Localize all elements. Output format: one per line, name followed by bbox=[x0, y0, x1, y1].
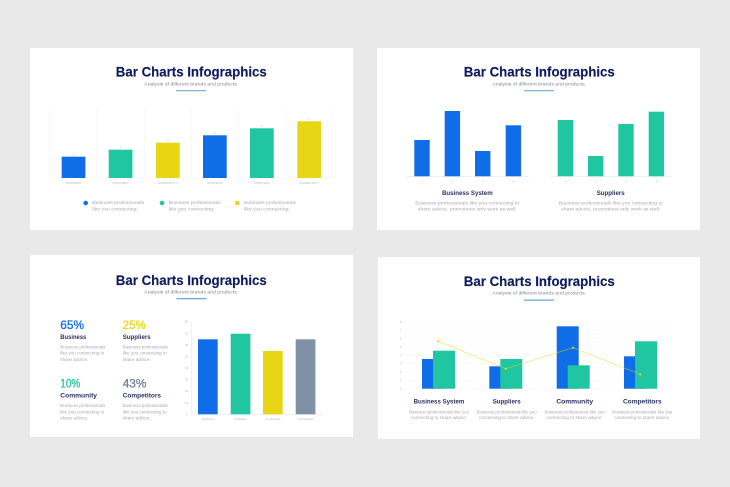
bar chart: six rising bars: 7 bbox=[308, 117, 310, 121]
stat: competitors 43%: like you connecting to bbox=[123, 409, 167, 415]
legend: like you connecting. bbox=[92, 207, 138, 213]
bar chart: suppliers: 3 bbox=[625, 180, 627, 184]
stat: business 65%: share advice. bbox=[60, 357, 88, 363]
title underline bbox=[524, 300, 554, 301]
text block: competitors: connecting to share advice. bbox=[614, 415, 670, 421]
text block: community: Business professionals like you bbox=[545, 409, 605, 415]
subtitle: Analysis of different brands and products. bbox=[492, 291, 586, 297]
bar chart: business system: 2 bbox=[452, 180, 454, 184]
bar chart: four columns: Business bbox=[202, 417, 214, 421]
panel: two column charts slide bbox=[377, 48, 700, 230]
text block: business system bbox=[409, 399, 469, 421]
bar chart: four columns: 60 bbox=[185, 343, 189, 347]
text block: competitors: Business professionals like you bbox=[612, 409, 673, 415]
bar chart: four columns: 10 bbox=[185, 401, 189, 405]
bar chart: four columns bbox=[185, 320, 323, 421]
bar chart: six rising bars: COMMUNITY bbox=[299, 181, 319, 185]
bar chart: six rising bars: COMMUNITY bbox=[158, 181, 178, 185]
title: Bar Charts Infographics bbox=[464, 64, 615, 80]
text block: business system: Business System bbox=[414, 399, 464, 406]
text block: business system: Business System bbox=[442, 190, 493, 197]
bar chart: business system: 3 bbox=[482, 180, 484, 184]
stat: business 65%: Business professionals bbox=[60, 344, 106, 350]
stat: suppliers 25%: Business professionals bbox=[123, 344, 168, 350]
combo chart: bars and line: 2 bbox=[400, 370, 402, 374]
text block: business system bbox=[415, 190, 520, 213]
text block: competitors bbox=[612, 399, 673, 421]
bar chart: six rising bars: BUSINESS bbox=[207, 181, 222, 185]
panel: percentages and column chart slide bbox=[30, 255, 353, 437]
legend: Business professionals bbox=[244, 200, 297, 206]
bar chart: four columns: 0 bbox=[186, 412, 188, 416]
combo chart: bars and line: 5 bbox=[400, 345, 402, 349]
bar chart: six rising bars: 6 bbox=[261, 124, 263, 128]
stat: competitors 43%: Business professionals bbox=[123, 403, 168, 409]
text block: business system: connecting to share advice. bbox=[411, 415, 467, 421]
legend: like you connecting. bbox=[169, 207, 215, 213]
title: Bar Charts Infographics bbox=[116, 64, 267, 80]
combo chart: bars and line: 1 bbox=[400, 378, 402, 382]
text block: suppliers: Suppliers bbox=[493, 399, 521, 406]
stat: competitors 43%: Competitors bbox=[123, 393, 161, 400]
combo chart: bars and line: 3 bbox=[400, 362, 402, 366]
text block: business system: Business professionals like you bbox=[409, 409, 469, 415]
text block: suppliers: Business professionals like you connecting to bbox=[559, 200, 663, 206]
stat: business 65%: like you connecting to bbox=[60, 351, 105, 357]
text block: suppliers: Suppliers bbox=[597, 190, 625, 197]
panel: combo bar and line chart slide bbox=[378, 257, 700, 439]
text block: business system: share advice, promotions only work as well. bbox=[418, 207, 517, 213]
bar chart: six rising bars bbox=[62, 117, 321, 185]
text block: suppliers bbox=[559, 190, 663, 213]
text block: suppliers bbox=[477, 399, 537, 421]
bar chart: six rising bars: 3 bbox=[120, 146, 122, 150]
text block: suppliers: Business professionals like you bbox=[477, 409, 537, 415]
stat: suppliers 25%: share advice. bbox=[123, 357, 151, 363]
text block: business system: Business professionals like you connecting to bbox=[415, 200, 520, 206]
bar chart: six rising bars: SUPPLIERS bbox=[112, 181, 128, 185]
stat: community 10%: like you connecting to bbox=[60, 409, 105, 415]
text block: suppliers: share advice, promotions only work as well. bbox=[561, 207, 660, 213]
bar chart: six rising bars: BUSINESS bbox=[66, 181, 81, 185]
stat: community 10% bbox=[60, 377, 106, 421]
bar chart: six rising bars: 5 bbox=[214, 131, 216, 135]
text block: community: Community bbox=[556, 399, 593, 406]
bar chart: suppliers: 2 bbox=[595, 180, 597, 184]
bar chart: suppliers bbox=[550, 112, 672, 184]
bar chart: four columns: Community bbox=[265, 417, 281, 421]
combo chart: bars and line: 6 bbox=[400, 337, 402, 341]
title underline bbox=[176, 298, 206, 299]
text block: community bbox=[545, 399, 605, 421]
bar chart: four columns: 80 bbox=[185, 320, 189, 324]
bar chart: six rising bars: SUPPLIERS bbox=[254, 181, 270, 185]
legend: like you connecting. bbox=[244, 207, 290, 213]
bar chart: six rising bars: 2 bbox=[73, 152, 75, 156]
stat: suppliers 25%: like you connecting to bbox=[123, 351, 167, 357]
legend: Business professionals bbox=[92, 200, 145, 206]
text block: suppliers: connecting to share advice. bbox=[479, 415, 535, 421]
bar chart: four columns: 50 bbox=[185, 354, 189, 358]
stat: community 10%: share advice. bbox=[60, 415, 88, 421]
stat: community 10%: Community bbox=[60, 393, 97, 400]
bar chart: six rising bars: 4 bbox=[167, 138, 169, 142]
subtitle: Analysis of different brands and products. bbox=[144, 289, 238, 295]
bar chart: business system: 1 bbox=[421, 180, 423, 184]
stat: business 65%: Business bbox=[60, 334, 87, 341]
combo chart: bars and line bbox=[400, 320, 672, 391]
legend bbox=[83, 200, 297, 213]
bar chart: four columns: 40 bbox=[185, 366, 189, 370]
stat: suppliers 25%: 25% bbox=[123, 318, 146, 332]
stat: business 65%: 65% bbox=[60, 318, 84, 332]
bar chart: four columns: 30 bbox=[185, 378, 189, 382]
title: Bar Charts Infographics bbox=[464, 273, 615, 289]
bar chart: four columns: 70 bbox=[185, 331, 189, 335]
bar chart: four columns: 20 bbox=[185, 389, 189, 393]
title underline bbox=[524, 90, 554, 91]
legend: Business professionals bbox=[169, 200, 221, 206]
stat: competitors 43%: 43% bbox=[123, 377, 147, 391]
bar chart: business system bbox=[406, 111, 529, 184]
text block: community: connecting to share advice. bbox=[547, 415, 603, 421]
combo chart: bars and line: 8 bbox=[400, 320, 402, 324]
combo chart: bars and line: 7 bbox=[400, 328, 402, 332]
stat: community 10%: Business professionals bbox=[60, 403, 106, 409]
subtitle: Analysis of different brands and products. bbox=[144, 82, 238, 88]
stat: suppliers 25%: Suppliers bbox=[123, 334, 151, 341]
title: Bar Charts Infographics bbox=[116, 272, 267, 288]
text block: competitors: Competitors bbox=[623, 399, 662, 406]
bar chart: suppliers: 1 bbox=[565, 180, 567, 184]
bar chart: four columns: Suppliers bbox=[234, 417, 247, 421]
bar chart: suppliers: 4 bbox=[656, 180, 658, 184]
stat: suppliers 25% bbox=[123, 318, 168, 363]
stat: business 65% bbox=[60, 318, 106, 363]
bar chart: four columns: Competitors bbox=[297, 417, 314, 421]
title underline bbox=[176, 90, 206, 91]
subtitle: Analysis of different brands and products. bbox=[492, 82, 586, 88]
bar chart: business system: 4 bbox=[513, 180, 515, 184]
stat: community 10%: 10% bbox=[60, 377, 81, 391]
stat: competitors 43%: share advice. bbox=[123, 415, 151, 421]
stat: competitors 43% bbox=[123, 377, 168, 421]
combo chart: bars and line: 4 bbox=[400, 353, 402, 357]
combo chart: bars and line: 0 bbox=[400, 387, 402, 391]
panel: rising bar chart slide bbox=[30, 48, 353, 230]
